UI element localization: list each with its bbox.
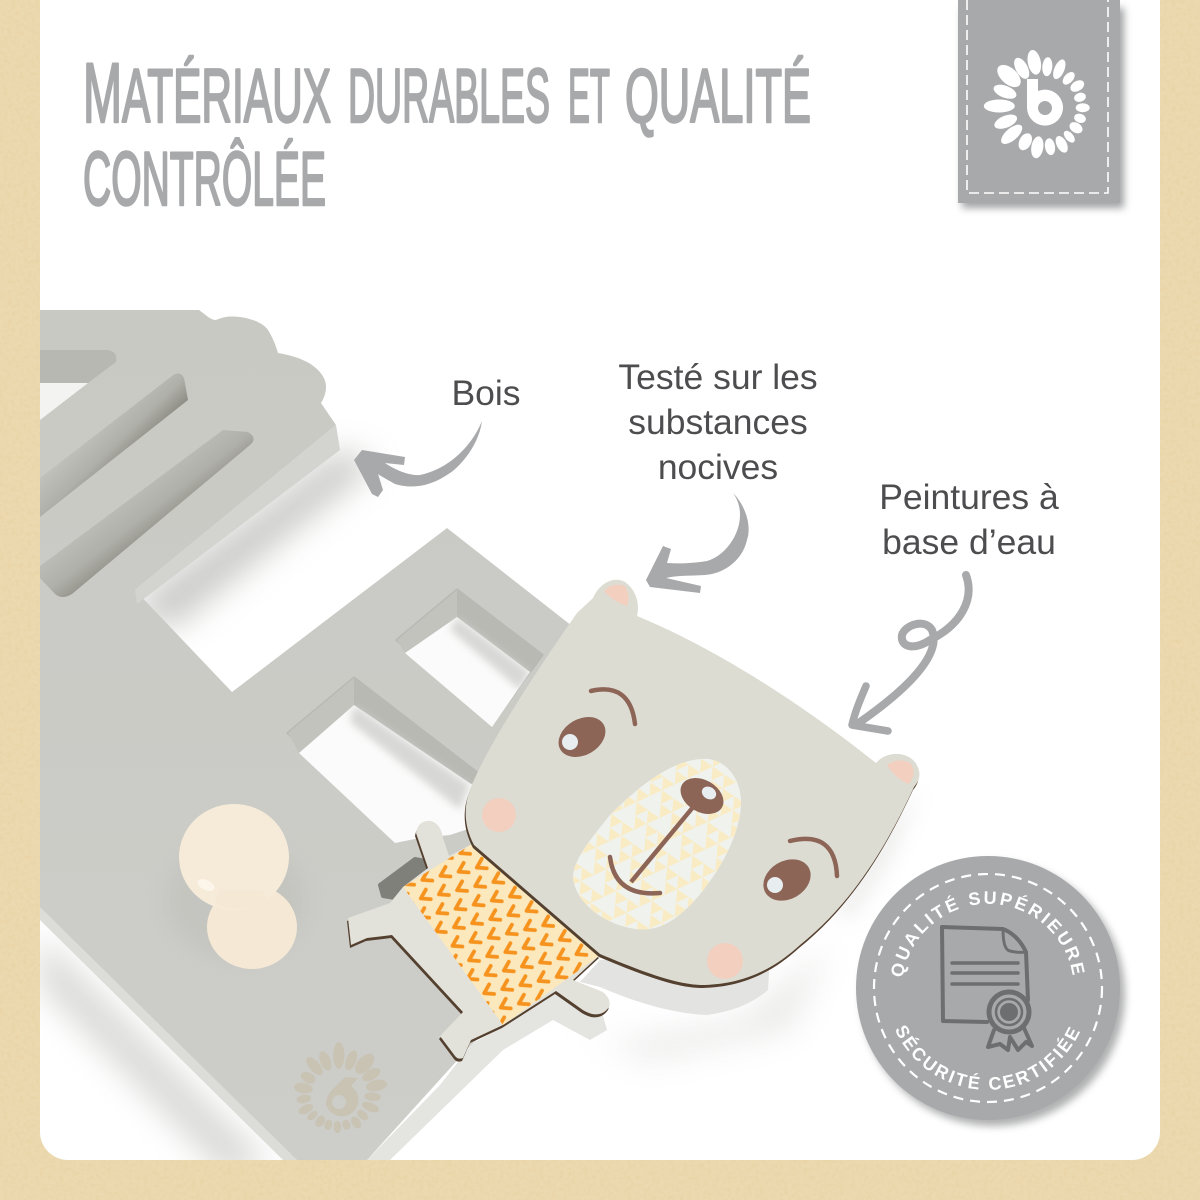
slot: lower xyxy=(40,430,254,597)
board top surface xyxy=(40,310,572,1160)
bear body xyxy=(347,821,610,1062)
label: Testé sur les substances nocives: substances xyxy=(628,402,808,442)
board lower-right side wall xyxy=(367,992,607,1160)
brand tag xyxy=(958,0,1124,208)
board lower-left side wall xyxy=(40,905,297,1160)
slot: middle xyxy=(40,373,188,517)
badge text: top: QUALITÉ SUPÉRIEURE xyxy=(892,891,1085,976)
wooden knob xyxy=(166,804,306,969)
label: Peintures à base d'eau: Peintures à xyxy=(879,477,1059,517)
certification badge xyxy=(856,856,1130,1130)
bear eyes xyxy=(551,709,818,909)
label: Peintures à base d'eau: base d’eau xyxy=(882,522,1056,562)
wooden board xyxy=(40,310,607,1160)
title: ET xyxy=(568,54,610,139)
notch wall xyxy=(135,425,340,604)
title xyxy=(83,46,811,222)
label: Testé sur les substances nocives: Testé sur les xyxy=(618,357,818,397)
arrow: peintures xyxy=(852,575,969,731)
title: DURABLES xyxy=(348,54,550,139)
bear scarf xyxy=(403,844,600,1025)
bear head edge xyxy=(465,583,918,988)
icon: brand flower logo xyxy=(984,49,1090,159)
bear muzzle xyxy=(573,759,741,930)
arrow: Bois xyxy=(354,421,482,497)
bear eyebrows xyxy=(591,689,837,876)
soft shadows on the card xyxy=(40,450,920,1175)
title: MATÉRIAUX xyxy=(83,46,331,140)
board slot under bear arm xyxy=(380,859,426,898)
bear head xyxy=(466,580,919,985)
arrow: substances xyxy=(646,493,749,593)
title: CONTRÔLÉE xyxy=(83,137,326,222)
slot: top xyxy=(40,350,116,383)
window: lower xyxy=(288,678,480,843)
badge text: bottom: SÉCURITÉ CERTIFIÉE xyxy=(896,1026,1080,1090)
label: Testé sur les substances nocives: nocives xyxy=(658,447,778,487)
window: upper xyxy=(397,590,542,727)
engraved brand logo xyxy=(293,1042,388,1133)
bear cheeks xyxy=(482,798,743,979)
board edge under bear head xyxy=(580,955,770,1015)
icon: certificate document xyxy=(942,927,1032,1050)
label: Testé sur les substances nocives xyxy=(618,357,818,487)
title: QUALITÉ xyxy=(625,54,811,139)
label: Bois: Bois xyxy=(451,373,521,413)
label: Peintures à base d'eau xyxy=(879,477,1059,562)
bear xyxy=(347,580,919,1062)
bear ears xyxy=(604,585,914,784)
bear nose and mouth xyxy=(610,771,730,893)
hole: top xyxy=(40,383,88,420)
